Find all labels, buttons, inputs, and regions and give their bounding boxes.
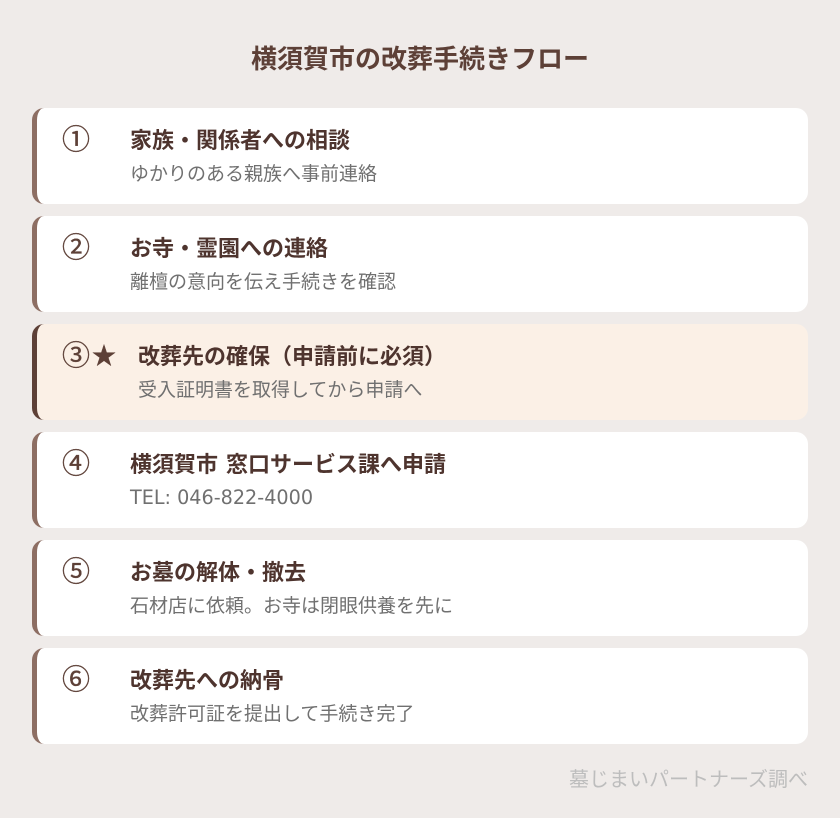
panel: step 4 — [32, 432, 808, 528]
step 4 heading: 横須賀市 窓口サービス課へ申請 — [130, 447, 446, 479]
step 6 number: ⑥ — [62, 658, 90, 698]
step 4 description: TEL: 046-822-4000 — [130, 486, 313, 509]
step 1 description: ゆかりのある親族へ事前連絡 — [130, 159, 377, 186]
step 3 description: 受入証明書を取得してから申請へ — [138, 375, 422, 402]
panel: step 2 — [32, 216, 808, 312]
step 5 description: 石材店に依頼。お寺は閉眼供養を先に — [130, 591, 453, 618]
step 2 description: 離檀の意向を伝え手続きを確認 — [130, 267, 396, 294]
panel: step 1 — [32, 108, 808, 204]
panel: step 3 highlighted — [32, 324, 808, 420]
step 6 heading: 改葬先への納骨 — [130, 663, 284, 695]
step 3 number with star: ③ — [62, 334, 90, 374]
step 5 heading: お墓の解体・撤去 — [130, 555, 306, 587]
step 3 heading: 改葬先の確保（申請前に必須） — [138, 339, 446, 371]
step 1 heading: 家族・関係者への相談 — [130, 123, 350, 155]
step 5 number: ⑤ — [62, 550, 90, 590]
source note: 墓じまいパートナーズ調べ — [569, 763, 808, 792]
step 3 number with star — [62, 334, 116, 374]
panel: step 3 highlighted: ★ — [92, 336, 116, 371]
step 2 number: ② — [62, 226, 90, 266]
step 2 heading: お寺・霊園への連絡 — [130, 231, 328, 263]
panel: step 6 — [32, 648, 808, 744]
title: 横須賀市の改葬手続きフロー — [251, 39, 589, 76]
step 1 number: ① — [62, 118, 90, 158]
step 6 description: 改葬許可証を提出して手続き完了 — [130, 699, 414, 726]
panel: step 5 — [32, 540, 808, 636]
step 4 number: ④ — [62, 442, 90, 482]
